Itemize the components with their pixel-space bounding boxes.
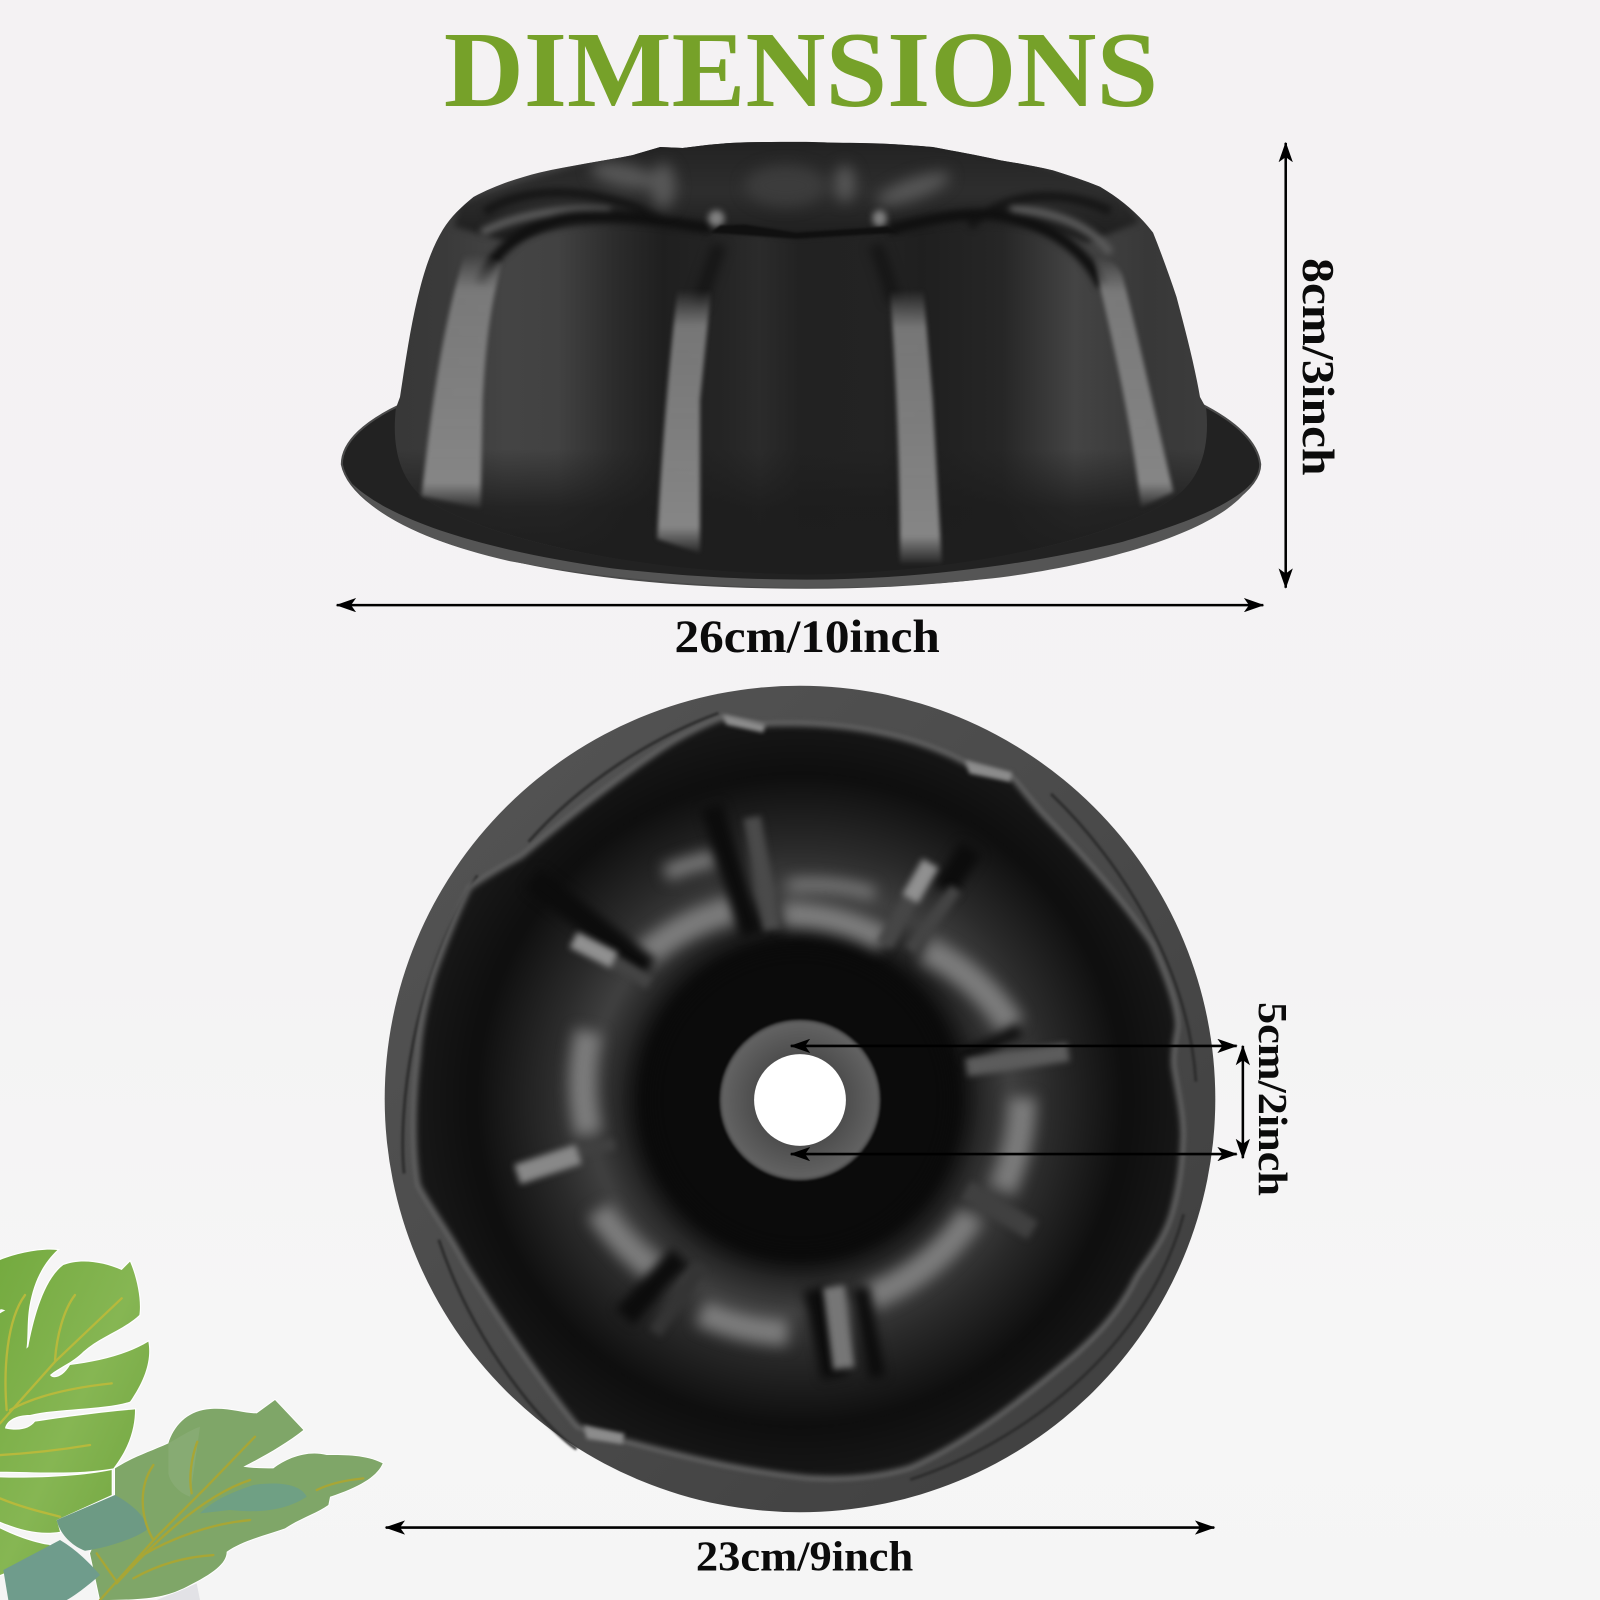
ring highlight arcs: [583, 858, 1022, 1333]
arrow: bottom width: [386, 1526, 1214, 1529]
arrow: tube lower guide: [791, 1153, 1237, 1155]
pan rim: [342, 403, 1260, 588]
top width label: 26cm/10inch: [674, 611, 940, 663]
top folds and shading: [404, 142, 1198, 574]
upper ruffle area: [454, 140, 1139, 243]
outer fold shoulders: [480, 193, 1110, 286]
centre hole: [754, 1054, 846, 1146]
title: DIMENSIONS: [444, 11, 1158, 130]
bright monstera leaf: [0, 1250, 149, 1575]
pan body: [395, 142, 1207, 574]
arrow: height of pan: [1284, 143, 1287, 588]
outer rim: [385, 686, 1215, 1512]
dark centre well: [647, 947, 953, 1253]
panel: bundt pan top view: [385, 686, 1215, 1512]
rear leaf veins: [97, 1437, 363, 1600]
cavity ribs: [517, 817, 1068, 1368]
bottom width label: 23cm/9inch: [696, 1534, 913, 1580]
leaf veins: [0, 1295, 122, 1517]
muted rear leaf: [90, 1400, 383, 1600]
height label: 8cm/3inch: [1293, 258, 1344, 476]
lobe dividers: [698, 246, 896, 299]
inner ruffle light patches: [588, 157, 953, 212]
crease dark notch: [710, 224, 898, 239]
teal leaf parts: [3, 1484, 307, 1600]
rim contour lines: [403, 713, 1196, 1480]
tube diameter label: 5cm/2inch: [1250, 1002, 1295, 1196]
icon: decorative plant leaves: [0, 1250, 383, 1600]
scalloped inner cavity: [416, 720, 1181, 1476]
body highlight strips: [421, 254, 1173, 563]
rim highlight spots: [584, 714, 1012, 1444]
small bright ruffle spots: [708, 210, 887, 227]
pan rim lower lip: [352, 484, 1251, 588]
panel: bundt pan side view: [337, 140, 1265, 588]
arrow: tube diameter: [1242, 1046, 1244, 1158]
lighter leaf overlays: [168, 1427, 200, 1497]
rib shadows: [533, 806, 1020, 1378]
centre tube: [719, 1019, 881, 1181]
pot hint: [157, 1583, 200, 1600]
arrow: tube upper guide: [791, 1045, 1237, 1047]
arrow: top width: [337, 604, 1263, 606]
rim inner bright band: [416, 720, 1181, 1476]
bottom shade: [404, 464, 1198, 574]
